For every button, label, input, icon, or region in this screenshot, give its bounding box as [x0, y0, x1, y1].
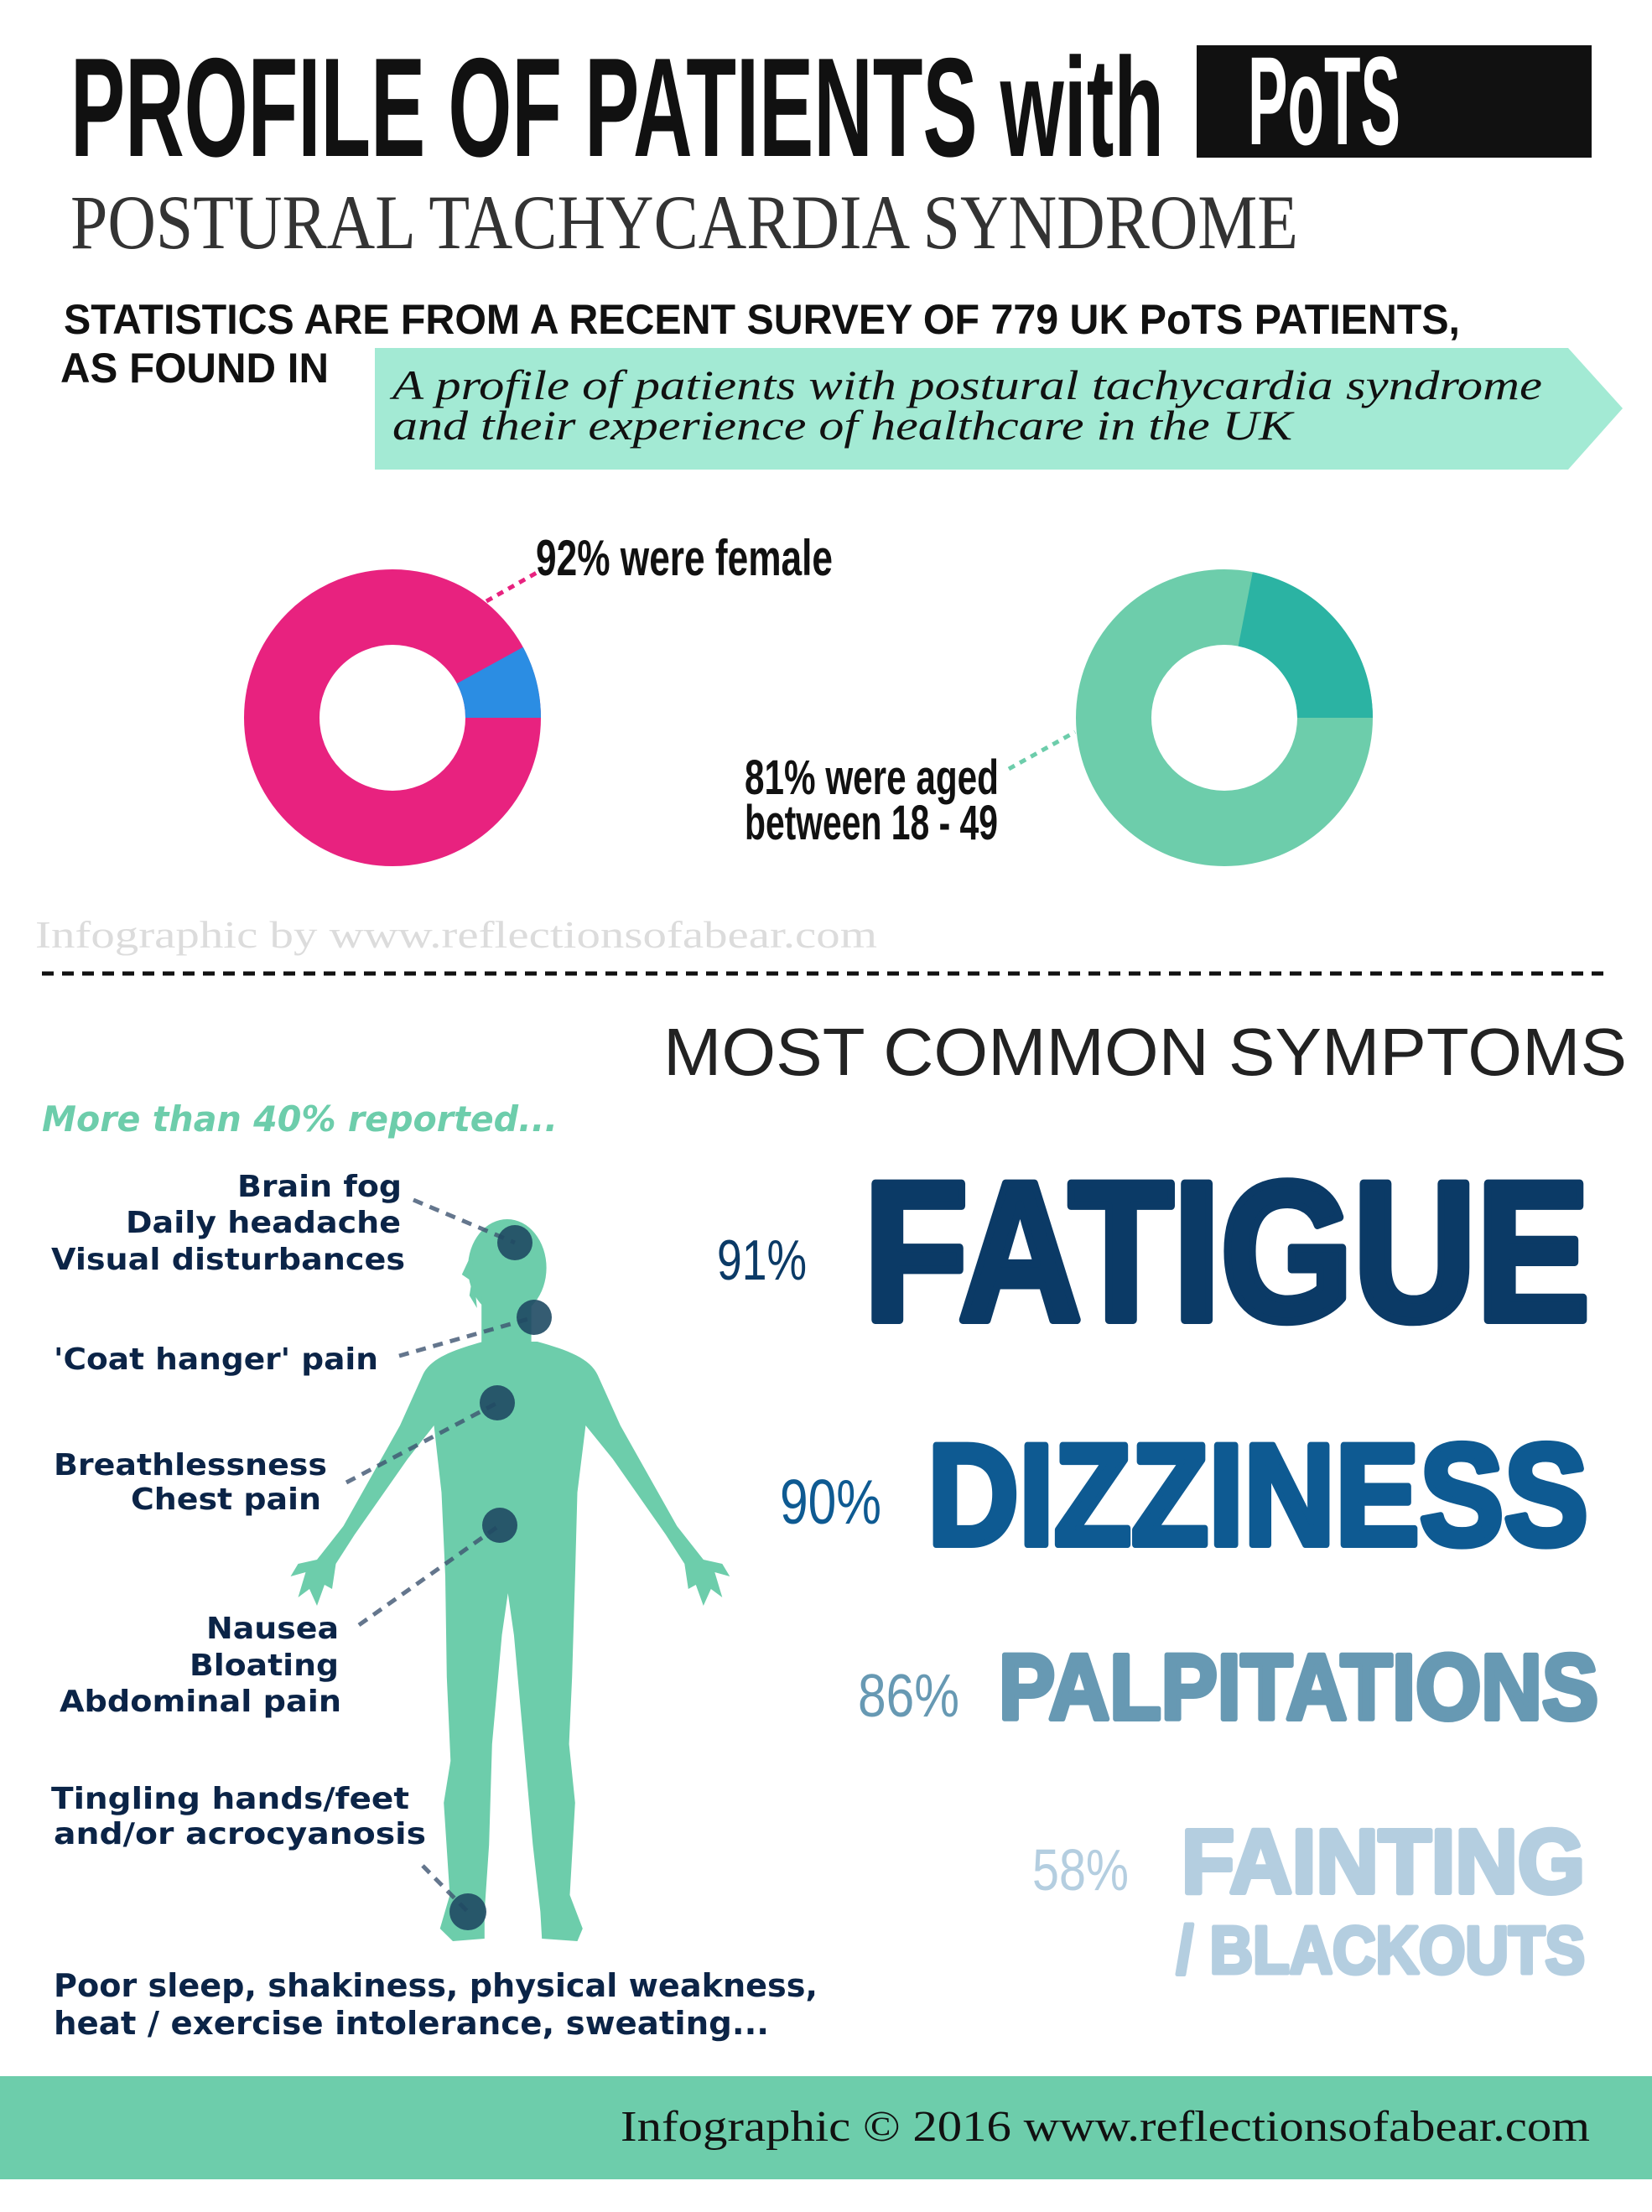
watermark: Infographic by www.reflectionsofabear.com	[35, 913, 877, 956]
donut chart: female	[282, 607, 541, 828]
label: chest symptoms: Breathlessness	[54, 1448, 327, 1482]
stats intro text	[60, 296, 1460, 392]
section heading: most common symptoms: MOST COMMON SYMPTOMS	[663, 1015, 1627, 1089]
stat: palpitations: PALPITATIONS	[999, 1636, 1598, 1739]
footer bar	[0, 2076, 1652, 2179]
symptom markers	[449, 1225, 552, 1930]
source banner arrow	[375, 348, 1623, 470]
title badge: PoTS: PoTS	[1248, 30, 1400, 171]
label: tingling	[51, 1782, 426, 1851]
label: abdominal symptoms	[60, 1612, 341, 1719]
label: head symptoms: Daily headache	[126, 1206, 401, 1240]
source banner arrow: A profile of patients with postural tachycardia syndrome	[389, 361, 1542, 408]
label: coat hanger pain: 'Coat hanger' pain	[54, 1342, 378, 1377]
label: head symptoms	[51, 1170, 405, 1277]
label: 92% female: 92% were female	[536, 530, 833, 586]
stats intro text: STATISTICS ARE FROM A RECENT SURVEY OF 779 UK PoTS PATIENTS,	[64, 296, 1460, 343]
label: 81% aged 18-49: 81% were aged	[745, 750, 999, 805]
label: abdominal symptoms: Abdominal pain	[60, 1685, 341, 1719]
connector: female	[486, 573, 537, 601]
stat: fainting: / BLACKOUTS	[1177, 1913, 1585, 1987]
source banner arrow: and their experience of healthcare in the UK	[392, 402, 1295, 449]
label: tingling: and/or acrocyanosis	[54, 1817, 426, 1851]
stat: dizziness: 90%	[780, 1467, 881, 1537]
connector: age	[1009, 732, 1075, 769]
stat: palpitations: 86%	[858, 1663, 959, 1730]
label: chest symptoms	[54, 1448, 327, 1517]
text: other symptoms: heat / exercise intolerance, sweating...	[54, 2005, 769, 2042]
subheading: more than 40%: More than 40% reported...	[42, 1098, 558, 1140]
label: chest symptoms: Chest pain	[131, 1482, 321, 1517]
stat: fatigue: 91%	[717, 1228, 807, 1292]
stat: fainting	[1032, 1810, 1585, 1987]
label: 81% aged 18-49: between 18 - 49	[745, 796, 998, 850]
label: head symptoms: Visual disturbances	[51, 1243, 405, 1277]
stat: fainting: FAINTING	[1182, 1810, 1585, 1912]
label: abdominal symptoms: Nausea	[206, 1612, 339, 1646]
label: head symptoms: Brain fog	[237, 1170, 402, 1204]
label: 81% aged 18-49	[745, 750, 999, 850]
label: tingling: Tingling hands/feet	[51, 1782, 409, 1816]
label: abdominal symptoms: Bloating	[190, 1649, 339, 1683]
text: other symptoms: Poor sleep, shakiness, physical weakness,	[54, 1967, 818, 2004]
footer bar: Infographic © 2016 www.reflectionsofabear.com	[621, 2103, 1590, 2151]
subtitle: POSTURAL TACHYCARDIA SYNDROME	[70, 179, 1298, 265]
donut chart: age	[1114, 572, 1373, 828]
connectors: symptom leaders	[346, 1200, 534, 1912]
body figure	[290, 1219, 730, 1941]
text: other symptoms	[54, 1967, 818, 2042]
stat: fainting: 58%	[1032, 1837, 1129, 1903]
stats intro text: AS FOUND IN	[60, 345, 329, 392]
